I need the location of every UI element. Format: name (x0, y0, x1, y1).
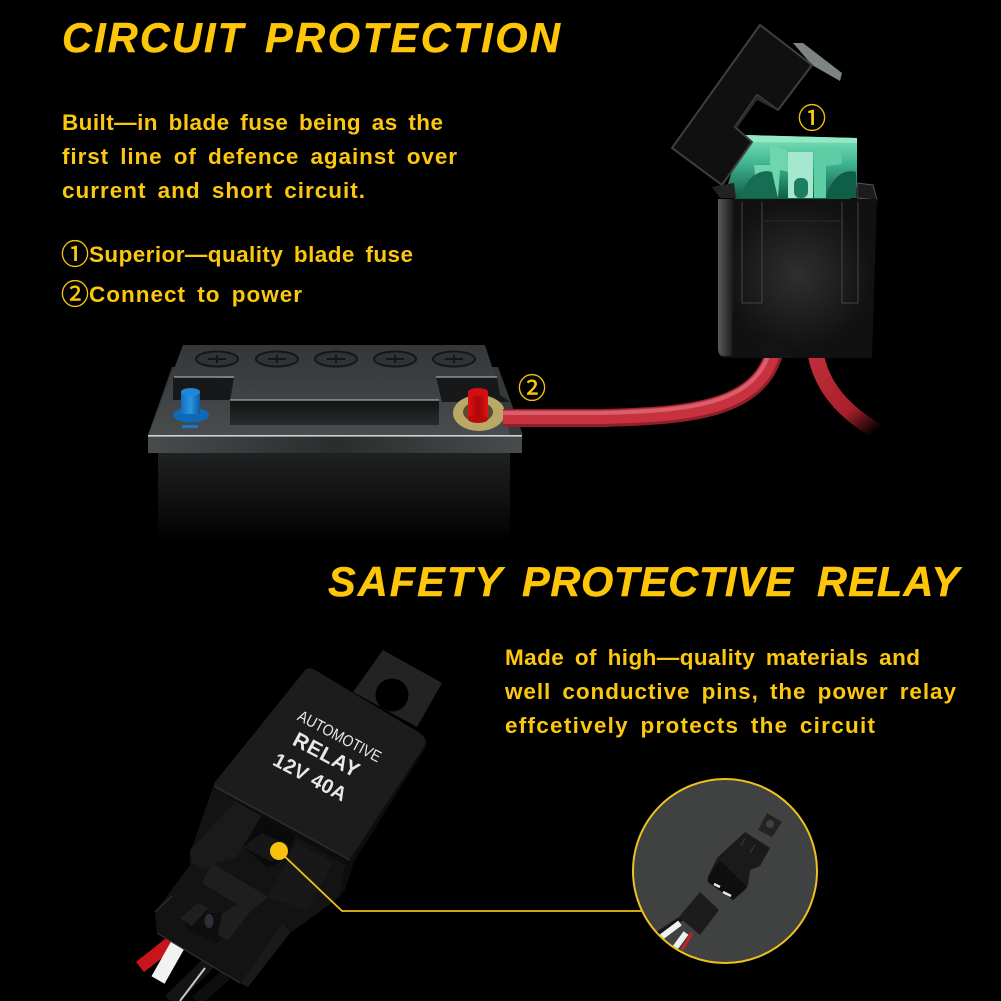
cell caps (196, 352, 475, 366)
text block: numbered features: Connect to power (89, 282, 302, 307)
relay label (269, 708, 384, 806)
relay label: AUTOMOTIVE (295, 708, 384, 766)
text block: numbered features: Superior—quality blade fuse (89, 242, 413, 267)
text block: fuse description: first line of defence against over (62, 144, 457, 169)
heading: safety protective relay: SAFETY (328, 558, 505, 605)
callout number 1: ① (798, 97, 826, 137)
inset: unplugged relay connector (633, 779, 817, 963)
wire: battery to fuse holder (503, 350, 775, 418)
heading: circuit protection (62, 14, 561, 61)
icon: automotive relay (140, 650, 442, 1001)
icon: car battery (148, 345, 523, 542)
battery front lip (148, 435, 522, 453)
relay label: RELAY (289, 728, 363, 782)
hinge and rim pieces (712, 183, 877, 200)
text block: numbered features: ② (61, 273, 89, 313)
text block: fuse description (62, 110, 457, 203)
text block: numbered features (61, 233, 413, 313)
inset relay (708, 813, 782, 900)
icon: fuse holder (672, 25, 877, 358)
callout leader line (270, 842, 643, 911)
heading: safety protective relay: PROTECTIVE (522, 558, 794, 605)
blade fuse (728, 135, 857, 200)
battery top face (148, 345, 510, 435)
heading: safety protective relay: RELAY (817, 558, 962, 605)
relay housing (213, 668, 426, 895)
inset connector (655, 892, 719, 950)
mounting tab (353, 650, 442, 727)
callout number 2: ② (518, 367, 546, 407)
heading: circuit protection: CIRCUIT (62, 14, 247, 61)
positive terminal (453, 388, 505, 431)
text block: fuse description: Built—in blade fuse being as the (62, 110, 443, 135)
terminal recesses (173, 377, 234, 400)
heading: circuit protection: PROTECTION (265, 14, 561, 61)
heading: safety protective relay (328, 558, 962, 605)
repaint holder base over wire top (760, 340, 790, 358)
text block: relay description: Made of high—quality materials and (505, 645, 920, 670)
relay label: 12V 40A (269, 749, 350, 806)
text block: fuse description: current and short circuit. (62, 178, 365, 203)
battery back shoulder (148, 367, 523, 435)
lid tab (793, 43, 842, 81)
negative terminal (173, 388, 209, 428)
holder body (718, 199, 877, 358)
text block: relay description: well conductive pins, the power relay (504, 679, 956, 704)
open lid (672, 25, 812, 185)
wire: fuse holder outgoing (815, 350, 882, 434)
battery lower body (158, 452, 510, 542)
connector housing (155, 787, 352, 983)
text block: numbered features: ① (61, 233, 89, 273)
text block: relay description: effcetively protects the circuit (505, 713, 876, 738)
relay wires (140, 934, 226, 1001)
text block: relay description (504, 645, 956, 738)
